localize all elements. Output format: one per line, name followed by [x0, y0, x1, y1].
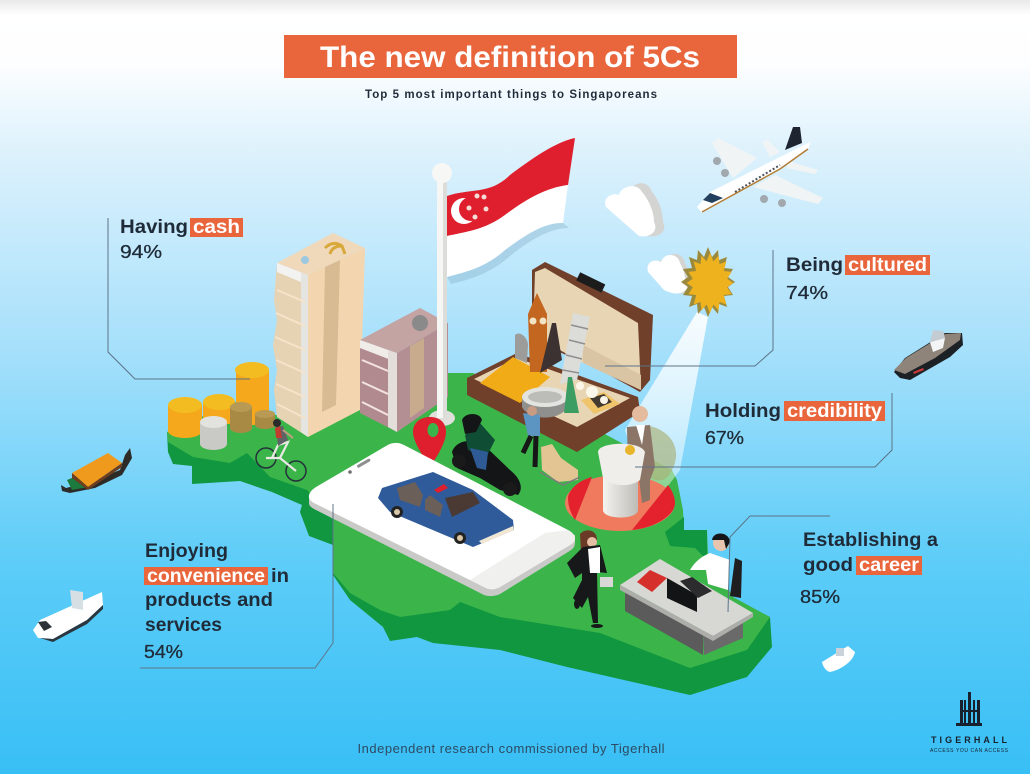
- Colosseum: [522, 387, 568, 418]
- label: enjoying convenience: products and: [145, 590, 273, 611]
- Tigerhall logo: TIGERHALL: [931, 735, 1008, 745]
- Eiffel tower: [540, 323, 562, 373]
- label: establishing a good career: [728, 516, 938, 612]
- subtitle: Top 5 most important things to Singaporeans: [365, 89, 657, 101]
- label: being cultured: cultured: [848, 255, 927, 276]
- label: having cash: 94%: [120, 242, 162, 262]
- label: enjoying convenience: services: [145, 615, 222, 636]
- logo mark: [956, 692, 982, 726]
- label: establishing a good career: career: [859, 555, 920, 576]
- clouds: [605, 183, 692, 294]
- label: being cultured: [605, 250, 930, 366]
- label: holding credibility: Holding: [705, 401, 781, 422]
- near tailplane: [787, 161, 818, 174]
- Tigerhall logo: [930, 692, 1009, 754]
- short stack of cash: [360, 308, 448, 432]
- title banner: The new definition of 5Cs: [320, 41, 700, 74]
- flag pole: [429, 163, 455, 426]
- open suitcase with landmarks: [467, 262, 653, 452]
- label: establishing a good career: 85%: [800, 587, 840, 607]
- far tailplane: [762, 140, 780, 157]
- light beam from sun: [625, 312, 708, 510]
- label: enjoying convenience: Enjoying: [145, 541, 228, 562]
- fuselage: [697, 142, 810, 213]
- label: enjoying convenience: in: [271, 566, 289, 587]
- airplane: [697, 127, 823, 213]
- terrain shading near podium: [665, 517, 707, 560]
- label: enjoying convenience: 54%: [144, 642, 183, 662]
- suitcase base: [467, 353, 640, 452]
- footer credit: Independent research commissioned by Tigerhall: [358, 741, 665, 756]
- red books: [637, 570, 667, 592]
- podium stage: [565, 475, 675, 531]
- label: having cash: cash: [193, 217, 240, 238]
- red location pin: [413, 417, 446, 467]
- suitcase lid: [532, 262, 653, 392]
- label: having cash: [108, 217, 250, 379]
- label: being cultured: Being: [786, 255, 843, 276]
- tall stack of cash: [273, 233, 365, 437]
- coin stacks: [168, 362, 275, 450]
- label: establishing a good career: good: [803, 555, 853, 576]
- worker with delivery cart: [523, 406, 580, 485]
- label: holding credibility: 67%: [705, 428, 744, 448]
- white boat lower left: [33, 590, 103, 642]
- island: [167, 373, 772, 695]
- cyclist: [256, 419, 306, 481]
- sampan boat: [61, 448, 132, 493]
- island top (green): [167, 373, 770, 668]
- office desk with employee: [620, 533, 753, 655]
- label: enjoying convenience: convenience: [147, 566, 265, 587]
- Tigerhall logo: ACCESS YOU CAN ACCESS: [930, 748, 1009, 754]
- lectern: [598, 444, 645, 518]
- employee: [690, 533, 742, 598]
- Singapore flag: [447, 138, 575, 284]
- lower wing: [753, 175, 823, 204]
- Statue of Liberty: [564, 377, 579, 413]
- engines: [713, 157, 786, 207]
- scooter rider: [452, 414, 521, 496]
- crescent and stars: [451, 194, 488, 224]
- title banner: [284, 35, 737, 78]
- island side (dark green): [167, 432, 772, 695]
- tail fin: [785, 127, 802, 150]
- sun icon: [681, 247, 735, 317]
- Leaning Tower of Pisa: [560, 313, 590, 384]
- label: having cash: Having: [120, 217, 188, 238]
- label: holding credibility: [635, 393, 892, 467]
- businesswoman walking: [567, 530, 613, 628]
- small white boat: [822, 646, 855, 672]
- label: establishing a good career: Establishing a: [803, 530, 938, 551]
- Big Ben: [528, 293, 547, 372]
- upper wing: [712, 138, 757, 178]
- label: enjoying convenience: [140, 504, 333, 668]
- grey statue: [515, 333, 528, 363]
- computer monitor: [667, 578, 697, 612]
- label: being cultured: 74%: [786, 283, 828, 303]
- blue car on phone: [378, 472, 514, 547]
- smartphone: [309, 443, 575, 596]
- Taj Mahal: [576, 382, 620, 414]
- businessman at podium: [627, 406, 676, 503]
- cargo ship: [894, 330, 963, 380]
- label: holding credibility: credibility: [787, 401, 882, 422]
